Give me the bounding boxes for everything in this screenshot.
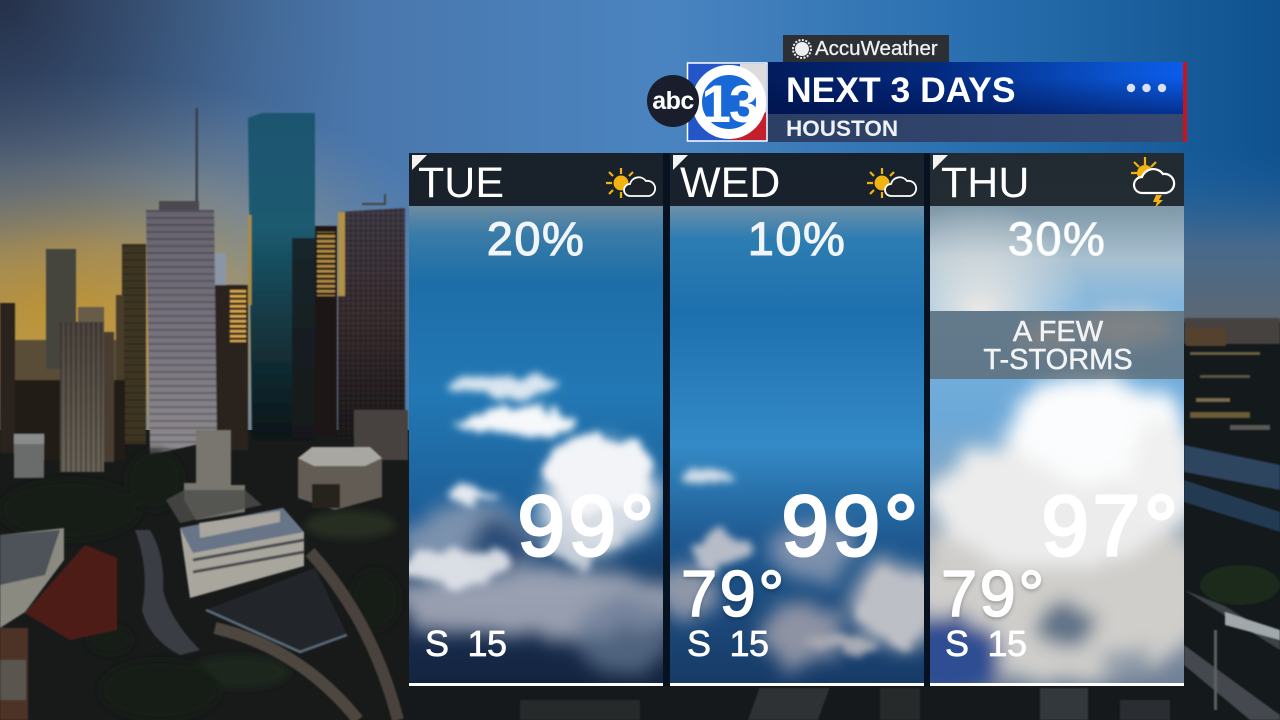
icon: sun and cloud [606, 168, 656, 198]
wind: S 15 [687, 623, 769, 664]
panel: Tuesday forecast [409, 76, 1173, 686]
station logo: abc [652, 87, 694, 115]
station logo: 13 [702, 75, 757, 134]
precipitation chance: 20% [487, 212, 585, 265]
condition band: T-STORMS [983, 344, 1133, 376]
location: HOUSTON [786, 116, 898, 141]
banner bottom: HOUSTON [767, 114, 1183, 142]
precipitation chance: 10% [748, 212, 846, 265]
icon: sun, cloud and lightning [1131, 157, 1176, 208]
icon: sun and cloud [867, 168, 918, 198]
header bar: TUE [409, 153, 663, 206]
day label: TUE [418, 159, 504, 207]
cloud photo: Wednesday [670, 206, 924, 683]
day label: WED [680, 159, 780, 207]
red edge [1183, 62, 1187, 142]
ellipsis dots [1126, 84, 1166, 92]
panel gaps [663, 153, 670, 686]
brand name: AccuWeather [815, 37, 938, 60]
title banner [616, 62, 1187, 193]
condition band [930, 311, 1184, 379]
banner top: NEXT 3 DAYS [767, 62, 1183, 114]
icon: AccuWeather sun [792, 39, 812, 59]
wind: S 15 [425, 623, 507, 664]
high temperature: 99° [781, 479, 922, 574]
low temperature: 79° [941, 557, 1047, 630]
corner marker [933, 155, 948, 170]
cloud photo: Tuesday [409, 206, 663, 683]
title: NEXT 3 DAYS [786, 70, 1016, 110]
low temperature: 79° [681, 557, 787, 630]
corner marker [412, 155, 427, 170]
AccuWeather tag [783, 35, 949, 62]
bottom line [409, 683, 663, 686]
cloud photo: Thursday [930, 206, 1184, 683]
bottom line [670, 683, 924, 686]
day label: THU [941, 159, 1029, 207]
condition band: A FEW [1013, 316, 1103, 348]
precipitation chance: 30% [1008, 212, 1106, 265]
corner marker [673, 155, 688, 170]
high temperature: 99° [517, 479, 658, 574]
panel: Wednesday forecast [670, 153, 924, 686]
wind: S 15 [945, 623, 1027, 664]
station logo [647, 62, 768, 142]
bottom line [930, 683, 1184, 686]
panel: Thursday forecast [930, 153, 1184, 686]
header bar: THU [930, 153, 1184, 206]
high temperature: 97° [1041, 479, 1182, 574]
header bar: WED [670, 153, 924, 206]
